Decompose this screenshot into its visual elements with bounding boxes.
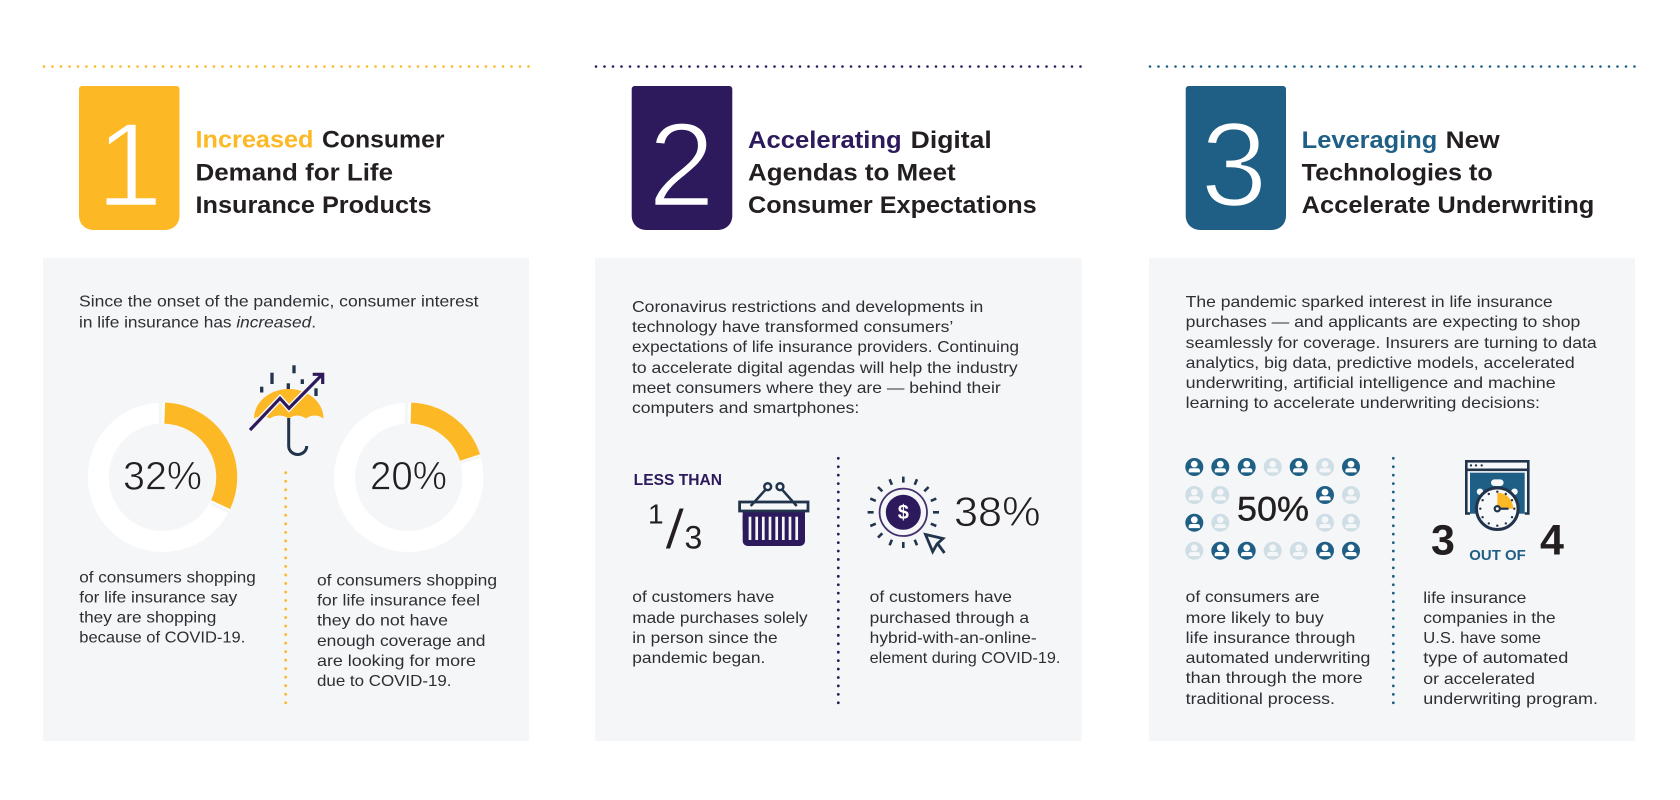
heading 2: Digital bbox=[911, 127, 992, 154]
heading 1: Demand for Life bbox=[196, 160, 393, 186]
donut chart 20%: 20% bbox=[370, 454, 447, 498]
text: 38% description: of customers have bbox=[870, 589, 1012, 606]
intro text 3 bbox=[1186, 294, 1597, 412]
text: one third description: made purchases solely bbox=[632, 610, 808, 627]
text: 50% description: traditional process. bbox=[1186, 691, 1335, 708]
heading 2: Accelerating bbox=[748, 127, 902, 154]
donut chart 32% bbox=[98, 400, 234, 542]
stat: 3 out of 4 bbox=[1431, 516, 1564, 564]
stat: 3 out of 4: 4 bbox=[1540, 516, 1564, 564]
intro text 3: underwriting, artificial intelligence and machine bbox=[1186, 375, 1556, 392]
text: one third description: in person since the bbox=[632, 630, 778, 647]
column 1: increased consumer demand bbox=[43, 66, 530, 741]
donut chart 32%: 32% bbox=[123, 454, 202, 498]
text: 20% description: are looking for more bbox=[317, 653, 476, 670]
text: 20% description: enough coverage and bbox=[317, 633, 486, 650]
heading 1: Consumer bbox=[322, 126, 444, 154]
icon: shopping basket bbox=[740, 483, 808, 546]
text: 3 out of 4 description: or accelerated bbox=[1423, 671, 1535, 688]
number badge 3 bbox=[1186, 86, 1286, 232]
intro text 3: seamlessly for coverage. Insurers are turning to data bbox=[1186, 335, 1597, 352]
panel 1 bbox=[43, 258, 529, 741]
intro text 2 bbox=[632, 299, 1019, 417]
stat: less than one third: / bbox=[665, 497, 685, 560]
text: 32% description: of consumers shopping bbox=[79, 569, 256, 586]
heading 3: Accelerate Underwriting bbox=[1302, 192, 1594, 219]
text: 20% description: for life insurance feel bbox=[317, 592, 480, 609]
heading 2: Consumer Expectations bbox=[748, 192, 1037, 219]
stat: 3 out of 4: 3 bbox=[1431, 516, 1455, 564]
intro text 2: computers and smartphones: bbox=[632, 400, 859, 417]
heading 1: Increased bbox=[196, 126, 314, 154]
intro text 1 bbox=[79, 294, 479, 332]
stat: less than one third bbox=[634, 472, 722, 560]
text: 50% description: of consumers are bbox=[1186, 589, 1320, 606]
panel 2 bbox=[595, 258, 1082, 741]
intro text 3: purchases — and applicants are expecting to shop bbox=[1186, 314, 1581, 331]
stat: 38%: 38% bbox=[954, 488, 1040, 535]
text: one third description: pandemic began. bbox=[632, 650, 765, 667]
text: one third description bbox=[632, 589, 808, 667]
text: 3 out of 4 description: life insurance bbox=[1423, 590, 1527, 607]
text: one third description: of customers have bbox=[632, 589, 775, 606]
heading 3 bbox=[1302, 127, 1594, 219]
intro text 2: meet consumers where they are — behind their bbox=[632, 380, 1001, 397]
text: 20% description: due to COVID-19. bbox=[317, 673, 452, 690]
icon grid: people 50% bbox=[1185, 458, 1360, 560]
donut chart 20% bbox=[344, 400, 484, 542]
stat: less than one third: LESS THAN bbox=[634, 472, 722, 489]
intro text 3: The pandemic sparked interest in life insurance bbox=[1186, 294, 1553, 311]
text: 38% description: purchased through a bbox=[870, 610, 1029, 627]
text: 50% description bbox=[1186, 589, 1370, 708]
heading 2: Agendas to Meet bbox=[748, 160, 956, 187]
text: 38% description bbox=[870, 589, 1060, 667]
number badge 3: 3 bbox=[1201, 98, 1267, 232]
icon: dollar coin with cursor bbox=[868, 477, 944, 553]
text: 32% description: for life insurance say bbox=[79, 589, 237, 606]
text: 3 out of 4 description: underwriting program. bbox=[1423, 691, 1598, 708]
intro text 3: analytics, big data, predictive models, accelerated bbox=[1186, 355, 1575, 372]
icon: umbrella with rising arrow bbox=[250, 365, 324, 454]
text: 20% description: of consumers shopping bbox=[317, 572, 497, 589]
intro text 1: in life insurance has increased . bbox=[79, 314, 316, 332]
text: 38% description: element during COVID-19. bbox=[870, 650, 1060, 667]
text: 20% description bbox=[317, 572, 497, 690]
number badge 2 bbox=[632, 86, 732, 232]
column 3: leveraging new technologies bbox=[1149, 66, 1636, 741]
icon: stopwatch in browser window bbox=[1466, 461, 1528, 530]
number badge 2: 2 bbox=[648, 98, 715, 232]
intro text 2: to accelerate digital agendas will help the industry bbox=[632, 360, 1018, 377]
text: 3 out of 4 description: U.S. have some bbox=[1423, 630, 1541, 647]
icon: dollar coin with cursor: $ bbox=[898, 502, 909, 524]
text: 3 out of 4 description: companies in the bbox=[1423, 610, 1556, 627]
text: 50% description: more likely to buy bbox=[1186, 610, 1324, 627]
text: 38% description: hybrid-with-an-online- bbox=[870, 630, 1037, 647]
text: 50% description: automated underwriting bbox=[1186, 650, 1370, 667]
intro text 2: technology have transformed consumers’ bbox=[632, 319, 953, 336]
number badge 1: 1 bbox=[96, 98, 163, 232]
text: 3 out of 4 description bbox=[1423, 590, 1598, 708]
intro text 2: Coronavirus restrictions and developments in bbox=[632, 299, 983, 316]
text: 32% description: because of COVID-19. bbox=[79, 629, 245, 646]
stat: 3 out of 4: OUT OF bbox=[1469, 547, 1526, 564]
heading 3: New bbox=[1446, 127, 1500, 154]
number badge 1 bbox=[79, 86, 180, 232]
text: 3 out of 4 description: type of automated bbox=[1423, 650, 1568, 667]
stat: less than one third: 3 bbox=[684, 519, 702, 555]
column 2: accelerating digital agendas bbox=[595, 66, 1082, 741]
text: 20% description: they do not have bbox=[317, 612, 448, 629]
text: 50% description: than through the more bbox=[1186, 670, 1363, 687]
heading 3: Leveraging bbox=[1302, 127, 1437, 154]
intro text 3: learning to accelerate underwriting decisions: bbox=[1186, 395, 1540, 412]
heading 3: Technologies to bbox=[1302, 160, 1493, 187]
heading 1 bbox=[196, 126, 444, 219]
intro text 2: expectations of life insurance providers. Continuing bbox=[632, 339, 1019, 356]
text: 32% description: they are shopping bbox=[79, 609, 216, 626]
heading 2 bbox=[748, 127, 1037, 219]
stat: less than one third: 1 bbox=[648, 498, 664, 529]
intro text 1: Since the onset of the pandemic, consumer interest bbox=[79, 294, 479, 310]
stat: 50%: 50% bbox=[1237, 491, 1309, 529]
text: 32% description bbox=[79, 569, 256, 646]
heading 1: Insurance Products bbox=[196, 192, 432, 219]
panel 3 bbox=[1149, 258, 1635, 741]
text: 50% description: life insurance through bbox=[1186, 630, 1355, 647]
